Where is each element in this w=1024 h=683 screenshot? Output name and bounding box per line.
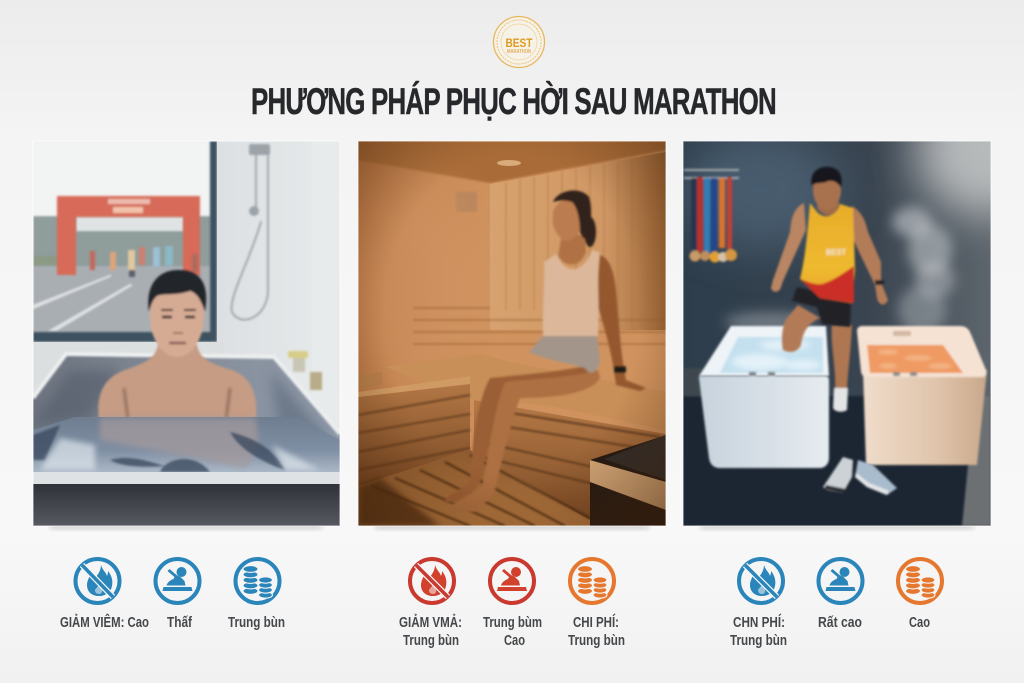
label: inflammation rating — [399, 614, 462, 649]
title: PHƯƠNG PHÁP PHỤC HỜI SAU MARATHON — [251, 80, 777, 122]
icon: muscle recovery — [818, 559, 862, 603]
floor slats — [358, 450, 600, 526]
icon: no inflammation — [410, 559, 454, 603]
woman — [444, 191, 646, 513]
tub interior — [33, 354, 340, 440]
label: recovery rating: Cao — [504, 633, 525, 649]
logo: Best Marathon badge: BEST — [506, 36, 533, 50]
icon: no inflammation — [739, 559, 783, 603]
panel shadows — [50, 522, 974, 529]
window frame — [33, 141, 217, 342]
singlet — [800, 203, 855, 303]
label: cost rating: Trung bùn — [228, 615, 285, 631]
arms — [771, 203, 806, 292]
tub: cold front — [699, 372, 829, 468]
tub: cold back — [699, 326, 829, 376]
label: inflammation rating: Trung bùn — [730, 633, 787, 649]
icon: muscle recovery — [490, 559, 534, 603]
vent — [456, 192, 477, 212]
back rest boards — [413, 308, 666, 344]
steam haze — [364, 202, 452, 378]
logo: Best Marathon badge — [494, 16, 544, 68]
label: recovery rating: Rất cao — [818, 615, 862, 631]
logo: Best Marathon badge: MARATHON — [507, 49, 531, 55]
panel: ice bath photo — [33, 141, 340, 526]
finish arch — [57, 196, 200, 276]
light haze — [888, 141, 991, 240]
panel: contrast bath photo — [683, 141, 991, 526]
right wall with slats — [490, 152, 666, 330]
tub: hot — [857, 326, 987, 465]
wall — [217, 142, 240, 354]
label: inflammation rating: CHN PHÍ: — [733, 614, 785, 631]
steam — [725, 207, 955, 334]
icons and ratings: contrast bath — [730, 559, 942, 649]
man: BEST — [826, 248, 846, 257]
label: cost rating — [568, 614, 625, 649]
tub front — [33, 472, 340, 475]
shoes — [823, 457, 897, 495]
icons and ratings: ice bath — [60, 559, 285, 631]
heater — [590, 435, 666, 526]
icon: cost — [898, 559, 942, 603]
ceiling — [358, 141, 666, 183]
label: cost rating: Trung bùn — [568, 633, 625, 649]
lower left bench — [358, 376, 470, 486]
water — [33, 417, 340, 472]
raised leg — [782, 305, 820, 352]
neck and head — [817, 200, 840, 215]
man — [771, 167, 888, 352]
label: inflammation rating: Trung bùn — [403, 633, 459, 649]
icon: muscle recovery — [156, 559, 200, 603]
label: cost rating: Cao — [909, 615, 930, 631]
shower — [232, 144, 270, 320]
back arm — [596, 255, 646, 391]
vignette — [358, 141, 666, 526]
icon: cost — [236, 559, 280, 603]
label: recovery rating — [483, 615, 542, 649]
label: inflammation rating: GIẢM VIÊM: Cao — [60, 613, 149, 631]
label: cost rating: CHI PHÍ: — [573, 614, 619, 631]
medals rack — [684, 169, 739, 262]
window view: sky, trees and road — [33, 141, 211, 334]
watch — [614, 366, 626, 373]
icon: cost — [570, 559, 614, 603]
label: inflammation rating: GIẢM VMẢ: — [399, 614, 462, 631]
shorts — [529, 335, 600, 373]
label: recovery rating: Trung bùm — [483, 615, 542, 631]
label: recovery rating: Thấf — [167, 615, 192, 631]
floor — [683, 396, 991, 526]
label: inflammation rating — [730, 614, 787, 649]
panel frames — [33, 141, 991, 526]
panel: sauna photo — [355, 141, 666, 526]
shorts — [792, 287, 851, 327]
icons and ratings: sauna — [399, 559, 625, 649]
upper bench seat — [388, 367, 390, 368]
icon: no inflammation — [76, 559, 120, 603]
neck and head — [558, 235, 586, 265]
legs — [444, 365, 590, 503]
standing leg — [832, 325, 852, 412]
tank top — [543, 250, 600, 336]
runners — [90, 246, 198, 277]
bottles — [288, 351, 322, 390]
man — [98, 270, 256, 420]
